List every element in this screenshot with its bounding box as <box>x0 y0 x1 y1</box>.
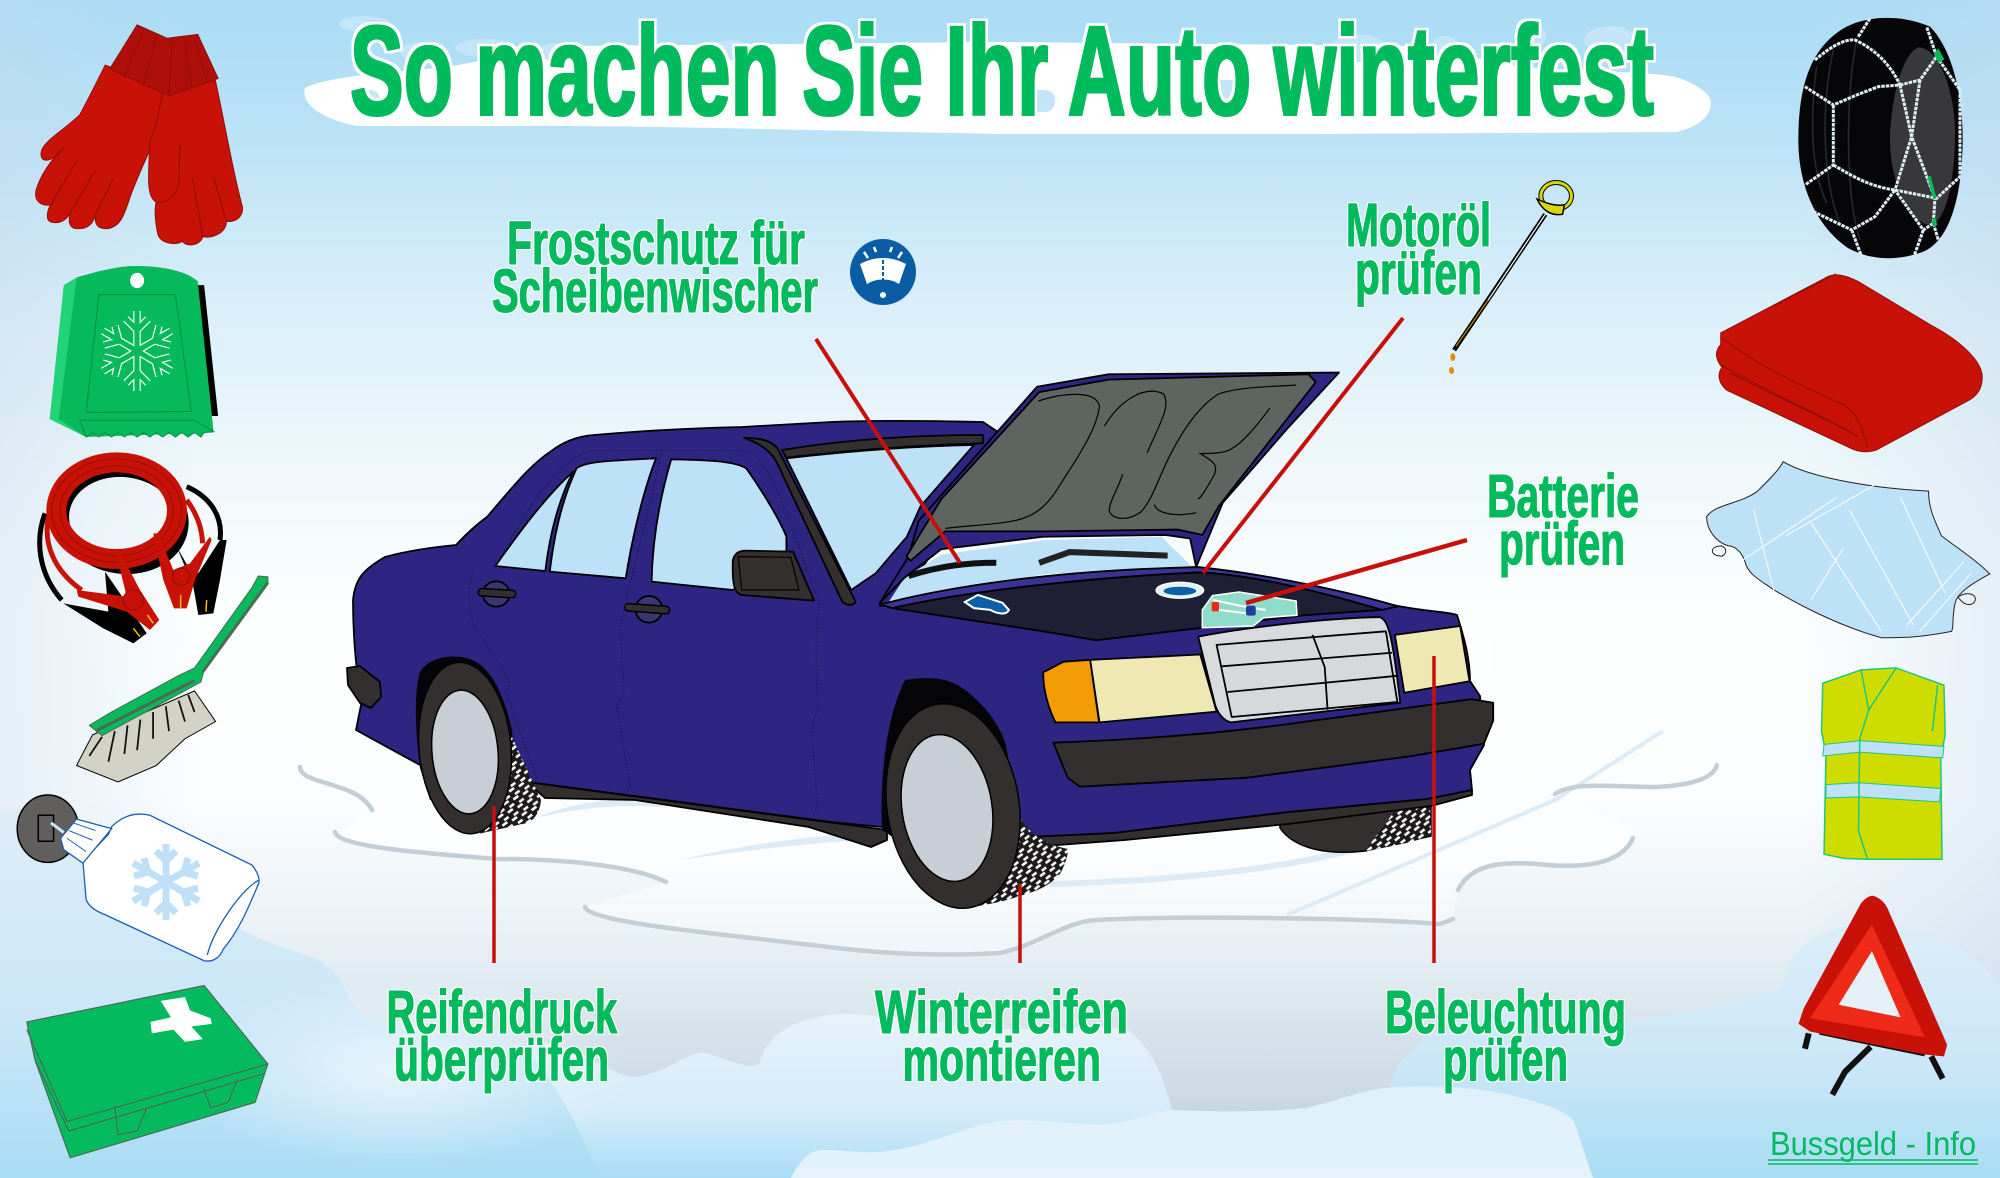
label: Reifendruck überprüfen: überprüfen <box>394 1026 609 1094</box>
icon: oil dipstick <box>1449 183 1571 374</box>
grille <box>1198 617 1400 722</box>
icon: folded red blanket <box>1717 274 1982 452</box>
label: Reifendruck überprüfen <box>386 978 617 1094</box>
label: Frostschutz für Scheibenwischer: Frostschutz für <box>507 209 805 277</box>
icon: windshield washer <box>850 239 916 305</box>
label: Frostschutz für Scheibenwischer: Scheibenwischer <box>492 257 818 325</box>
far front tyre <box>1280 800 1431 852</box>
icon: red gloves <box>36 25 243 245</box>
snowflake on scraper <box>103 311 171 391</box>
roof trim <box>782 435 983 458</box>
label: Frostschutz für Scheibenwischer <box>492 209 818 325</box>
label: Winterreifen montieren <box>875 978 1128 1094</box>
watermark: Bussgeld - Info: Bussgeld - Info <box>1770 1125 1976 1162</box>
A-pillar <box>744 438 856 605</box>
label: Motoröl prüfen: Motoröl <box>1346 191 1491 259</box>
washer fluid cap <box>965 595 1009 614</box>
door seams <box>469 451 820 817</box>
wipers <box>909 552 1168 576</box>
icon: warning triangle <box>1799 896 1947 1095</box>
rear door window <box>550 458 656 578</box>
hood underside <box>907 374 1316 561</box>
icon: windshield ice cover <box>1707 462 1990 638</box>
rear bumper <box>347 666 381 708</box>
label: Beleuchtung prüfen: prüfen <box>1443 1026 1568 1094</box>
icon: de-icer bottle <box>17 795 259 961</box>
label: Winterreifen montieren: Winterreifen <box>875 978 1128 1046</box>
icon: ice scraper <box>50 266 218 437</box>
battery <box>1202 592 1297 628</box>
label: Batterie prüfen: prüfen <box>1499 510 1625 578</box>
icon: first aid kit <box>27 986 268 1158</box>
callout line: Motoröl <box>1203 318 1403 573</box>
car <box>347 372 1493 918</box>
visible windshield under hood <box>888 537 1194 603</box>
label: Batterie prüfen <box>1487 462 1639 578</box>
label: Reifendruck überprüfen: Reifendruck <box>386 978 617 1046</box>
callout line: Winterreifen <box>1018 884 1022 963</box>
turn signal <box>1043 660 1099 722</box>
snowflake on bottle <box>133 844 199 920</box>
hood panel <box>880 372 1339 603</box>
engine bay <box>892 572 1382 640</box>
front bumper <box>1053 699 1493 787</box>
icon: high-visibility vest <box>1821 668 1945 859</box>
callout line: Batterie <box>1246 540 1467 603</box>
icon: tyre with snow chains <box>1798 18 1963 258</box>
front door window <box>652 459 786 590</box>
right headlight <box>1395 626 1470 693</box>
snowy road patch <box>300 640 1717 955</box>
left headlight <box>1090 655 1217 722</box>
label: Batterie prüfen: Batterie <box>1487 462 1639 530</box>
rear wheel <box>412 657 541 838</box>
side mirror <box>733 551 814 601</box>
door handles <box>482 581 666 623</box>
side details in zoom coordinates <box>469 435 983 817</box>
label: Motoröl prüfen: prüfen <box>1355 239 1482 307</box>
callout line: Beleuchtung <box>1432 656 1436 963</box>
cowl strip <box>880 567 1398 610</box>
icon: jump leads <box>40 459 227 643</box>
front wheel <box>872 678 1068 918</box>
rear quarter window <box>495 472 573 571</box>
hood stiffening lines <box>945 385 1296 529</box>
rear sill <box>527 782 887 847</box>
snow mounds at the bottom <box>0 810 2000 1178</box>
label: Winterreifen montieren: montieren <box>902 1026 1101 1094</box>
label: Motoröl prüfen <box>1346 191 1491 307</box>
callout line: Frostschutz <box>816 339 960 563</box>
oil cap <box>1156 582 1204 598</box>
label: Beleuchtung prüfen <box>1385 978 1626 1094</box>
hood and engine bay <box>880 372 1493 787</box>
front sill <box>1027 790 1472 847</box>
label: Beleuchtung prüfen: Beleuchtung <box>1385 978 1626 1046</box>
callout line: Reifendruck <box>492 806 496 963</box>
windshield <box>786 445 974 590</box>
icon: snow brush <box>77 576 268 782</box>
car body <box>353 421 1484 837</box>
